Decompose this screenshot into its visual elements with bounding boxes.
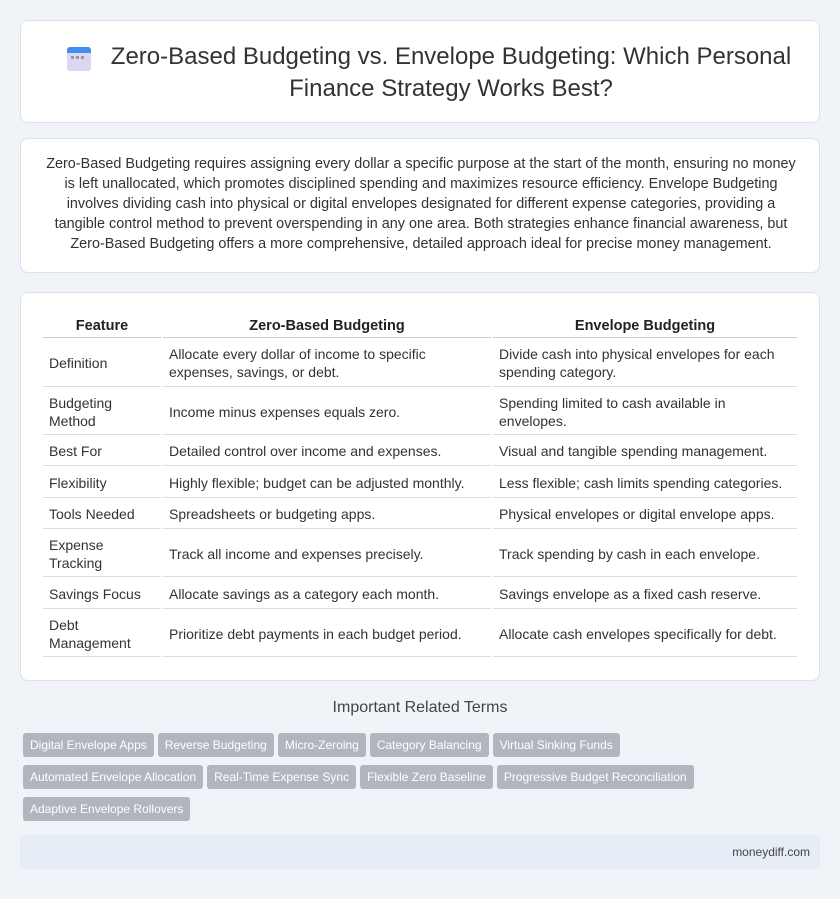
comparison table: Zero-Based Budgeting — [249, 318, 405, 334]
comparison table: Highly flexible; budget can be adjusted monthly. — [169, 474, 464, 490]
comparison table: Debt Management — [49, 616, 131, 650]
related terms tags: Real-Time Expense Sync — [214, 770, 349, 784]
comparison table: Flexibility — [49, 474, 107, 490]
related terms tags — [23, 733, 694, 821]
comparison table: Allocate savings as a category each month. — [169, 586, 439, 602]
comparison table — [20, 292, 820, 681]
title: Zero-Based Budgeting vs. Envelope Budgeting: Which Personal Finance Strategy Works Best? — [111, 43, 791, 102]
related terms tags: Flexible Zero Baseline — [367, 770, 486, 784]
comparison table: Budgeting Method — [49, 394, 112, 428]
comparison table: Detailed control over income and expenses. — [169, 443, 441, 459]
related terms tags: Micro-Zeroing — [285, 738, 359, 752]
icon: calendar — [67, 47, 91, 71]
comparison table: Definition — [49, 355, 107, 371]
related terms tags: Category Balancing — [377, 738, 482, 752]
comparison table: Tools Needed — [49, 506, 135, 522]
related terms heading: Important Related Terms — [333, 699, 507, 716]
comparison table: Physical envelopes or digital envelope apps. — [499, 506, 775, 522]
comparison table: Savings Focus — [49, 586, 141, 602]
intro text: Zero-Based Budgeting requires assigning every dollar a specific purpose at the start of the month, ensuring no money is left unallocated, which promotes disciplined spending and maximizes resource efficiency. Envelope Budgeting involves dividing cash into physical or digital envelopes designated for different expense categories, providing a tangible control method to prevent overspending in any one area. Both strategies enhance financial awareness, but Zero-Based Budgeting offers a more comprehensive, detailed approach ideal for precise money management. — [46, 156, 796, 252]
intro text — [20, 138, 820, 273]
footer — [20, 835, 820, 869]
comparison table: Divide cash into physical envelopes for each spending category. — [499, 346, 774, 380]
comparison table: Envelope Budgeting — [575, 318, 715, 334]
comparison table: Spending limited to cash available in envelopes. — [499, 394, 725, 428]
related terms tags: Virtual Sinking Funds — [500, 738, 613, 752]
comparison table: Savings envelope as a fixed cash reserve. — [499, 586, 761, 602]
comparison table: Income minus expenses equals zero. — [169, 404, 400, 420]
related terms tags: Automated Envelope Allocation — [30, 770, 196, 784]
comparison table: Expense Tracking — [49, 536, 103, 570]
footer: moneydiff.com — [732, 845, 810, 859]
related terms tags: Digital Envelope Apps — [30, 738, 147, 752]
comparison table: Less flexible; cash limits spending categories. — [499, 474, 782, 490]
comparison table: Prioritize debt payments in each budget period. — [169, 626, 462, 642]
header card — [20, 20, 820, 123]
related terms tags: Reverse Budgeting — [165, 738, 267, 752]
comparison table: Track all income and expenses precisely. — [169, 546, 423, 562]
comparison table: Visual and tangible spending management. — [499, 443, 767, 459]
related terms tags: Progressive Budget Reconciliation — [504, 770, 687, 784]
comparison table: Track spending by cash in each envelope. — [499, 546, 760, 562]
comparison table: Best For — [49, 443, 102, 459]
comparison table: Spreadsheets or budgeting apps. — [169, 506, 375, 522]
comparison table: Allocate cash envelopes specifically for debt. — [499, 626, 777, 642]
related terms tags: Adaptive Envelope Rollovers — [30, 802, 183, 816]
comparison table: Allocate every dollar of income to specific expenses, savings, or debt. — [169, 346, 426, 380]
comparison table: Feature — [76, 318, 128, 334]
